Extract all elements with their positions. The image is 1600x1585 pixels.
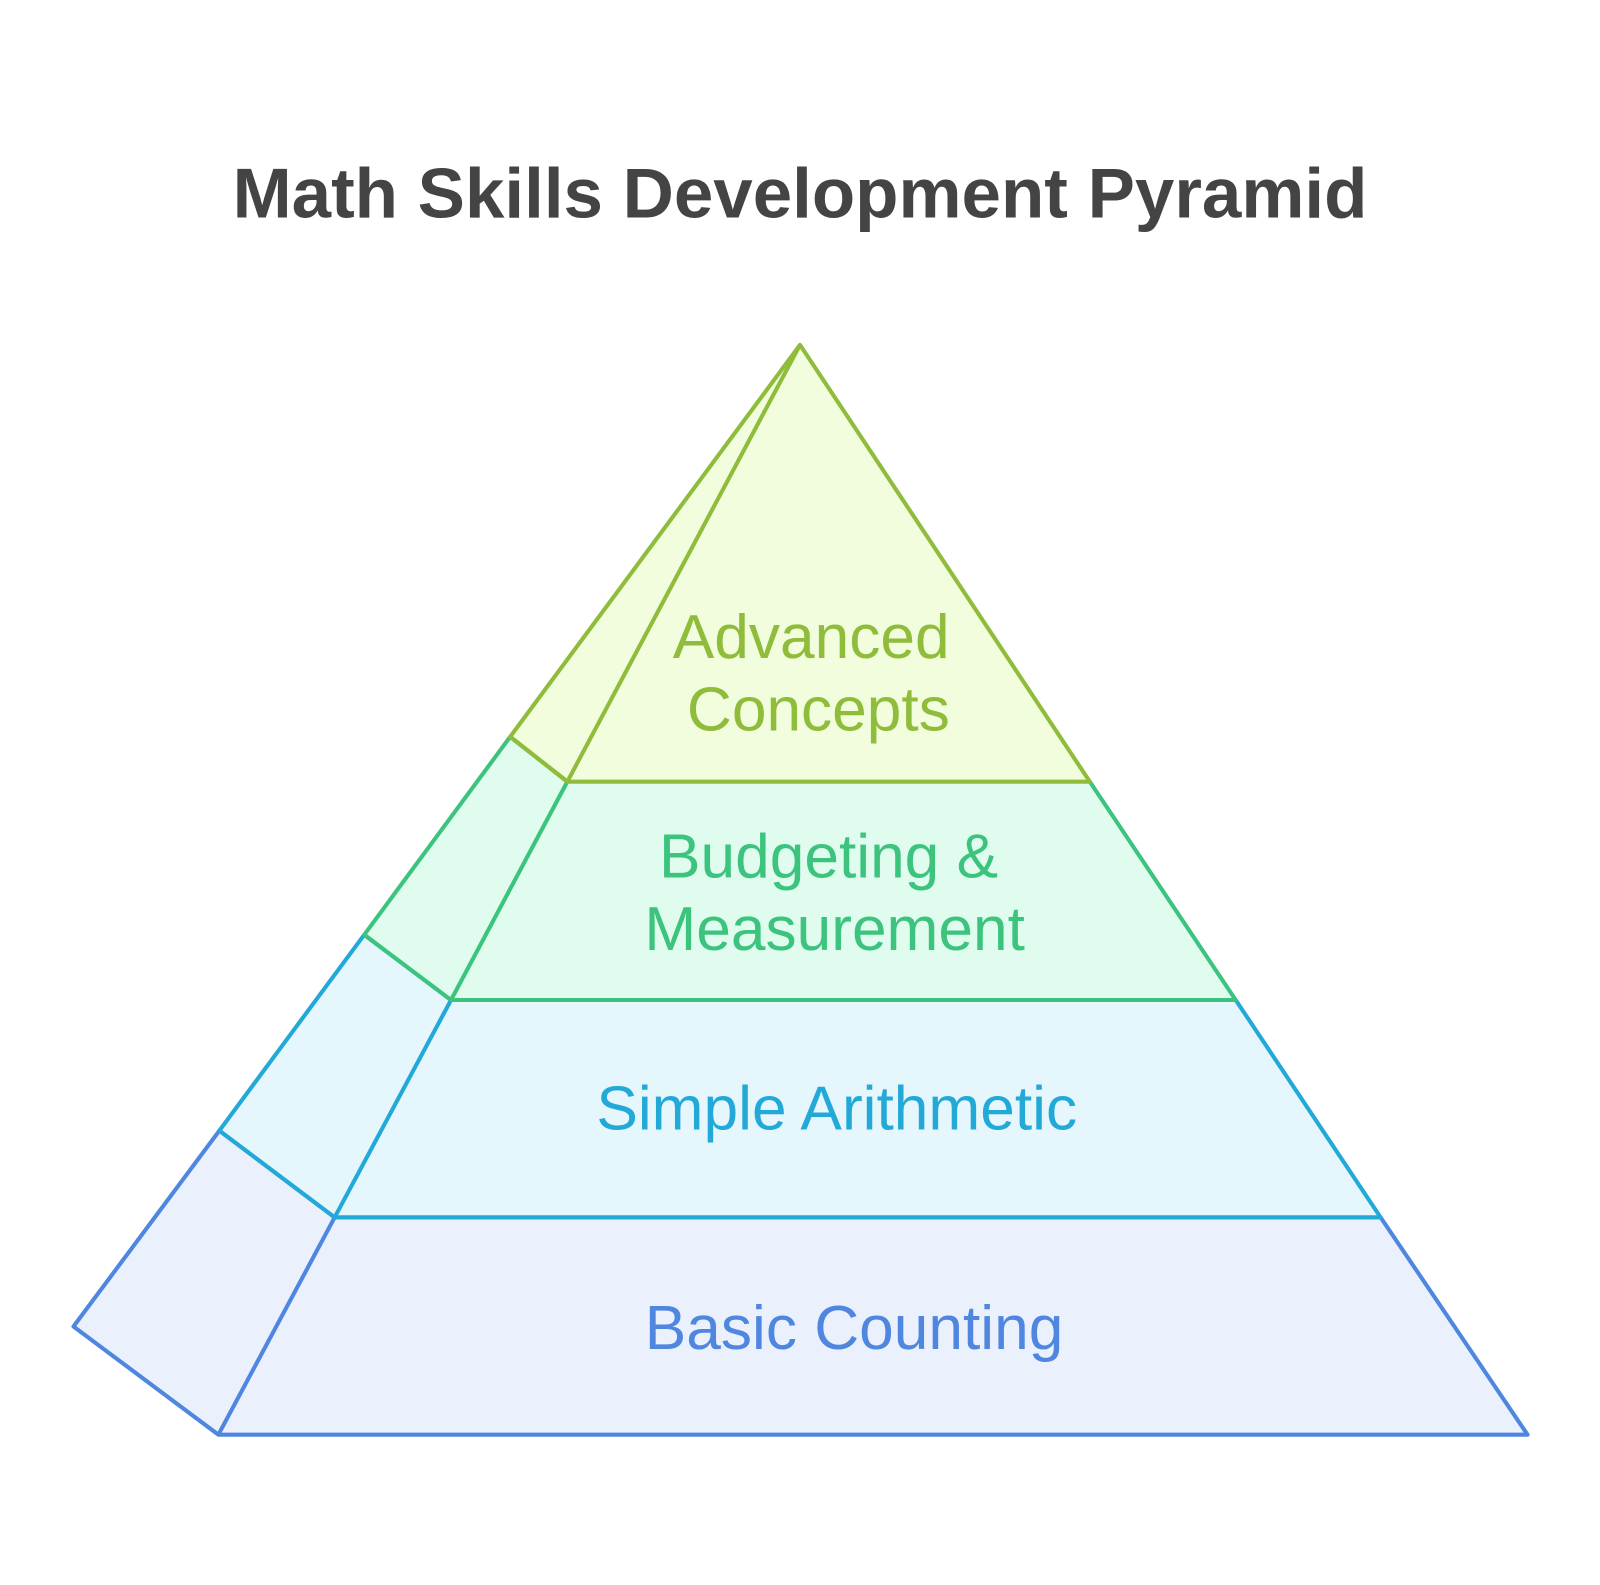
layer: budgeting & measurement: Measurement [644, 895, 1025, 964]
layer: advanced concepts: Concepts [687, 676, 950, 745]
layer: basic counting [73, 1131, 1528, 1435]
layer: advanced concepts: Advanced [673, 603, 950, 672]
layer: simple arithmetic [219, 935, 1381, 1217]
layer: budgeting & measurement: Budgeting & [659, 823, 998, 892]
layer: basic counting: Basic Counting [645, 1294, 1063, 1363]
title: Math Skills Development Pyramid [233, 154, 1367, 233]
layer: budgeting & measurement [364, 737, 1236, 1000]
layer: simple arithmetic: Simple Arithmetic [596, 1075, 1077, 1144]
layer: advanced concepts [510, 345, 1090, 782]
